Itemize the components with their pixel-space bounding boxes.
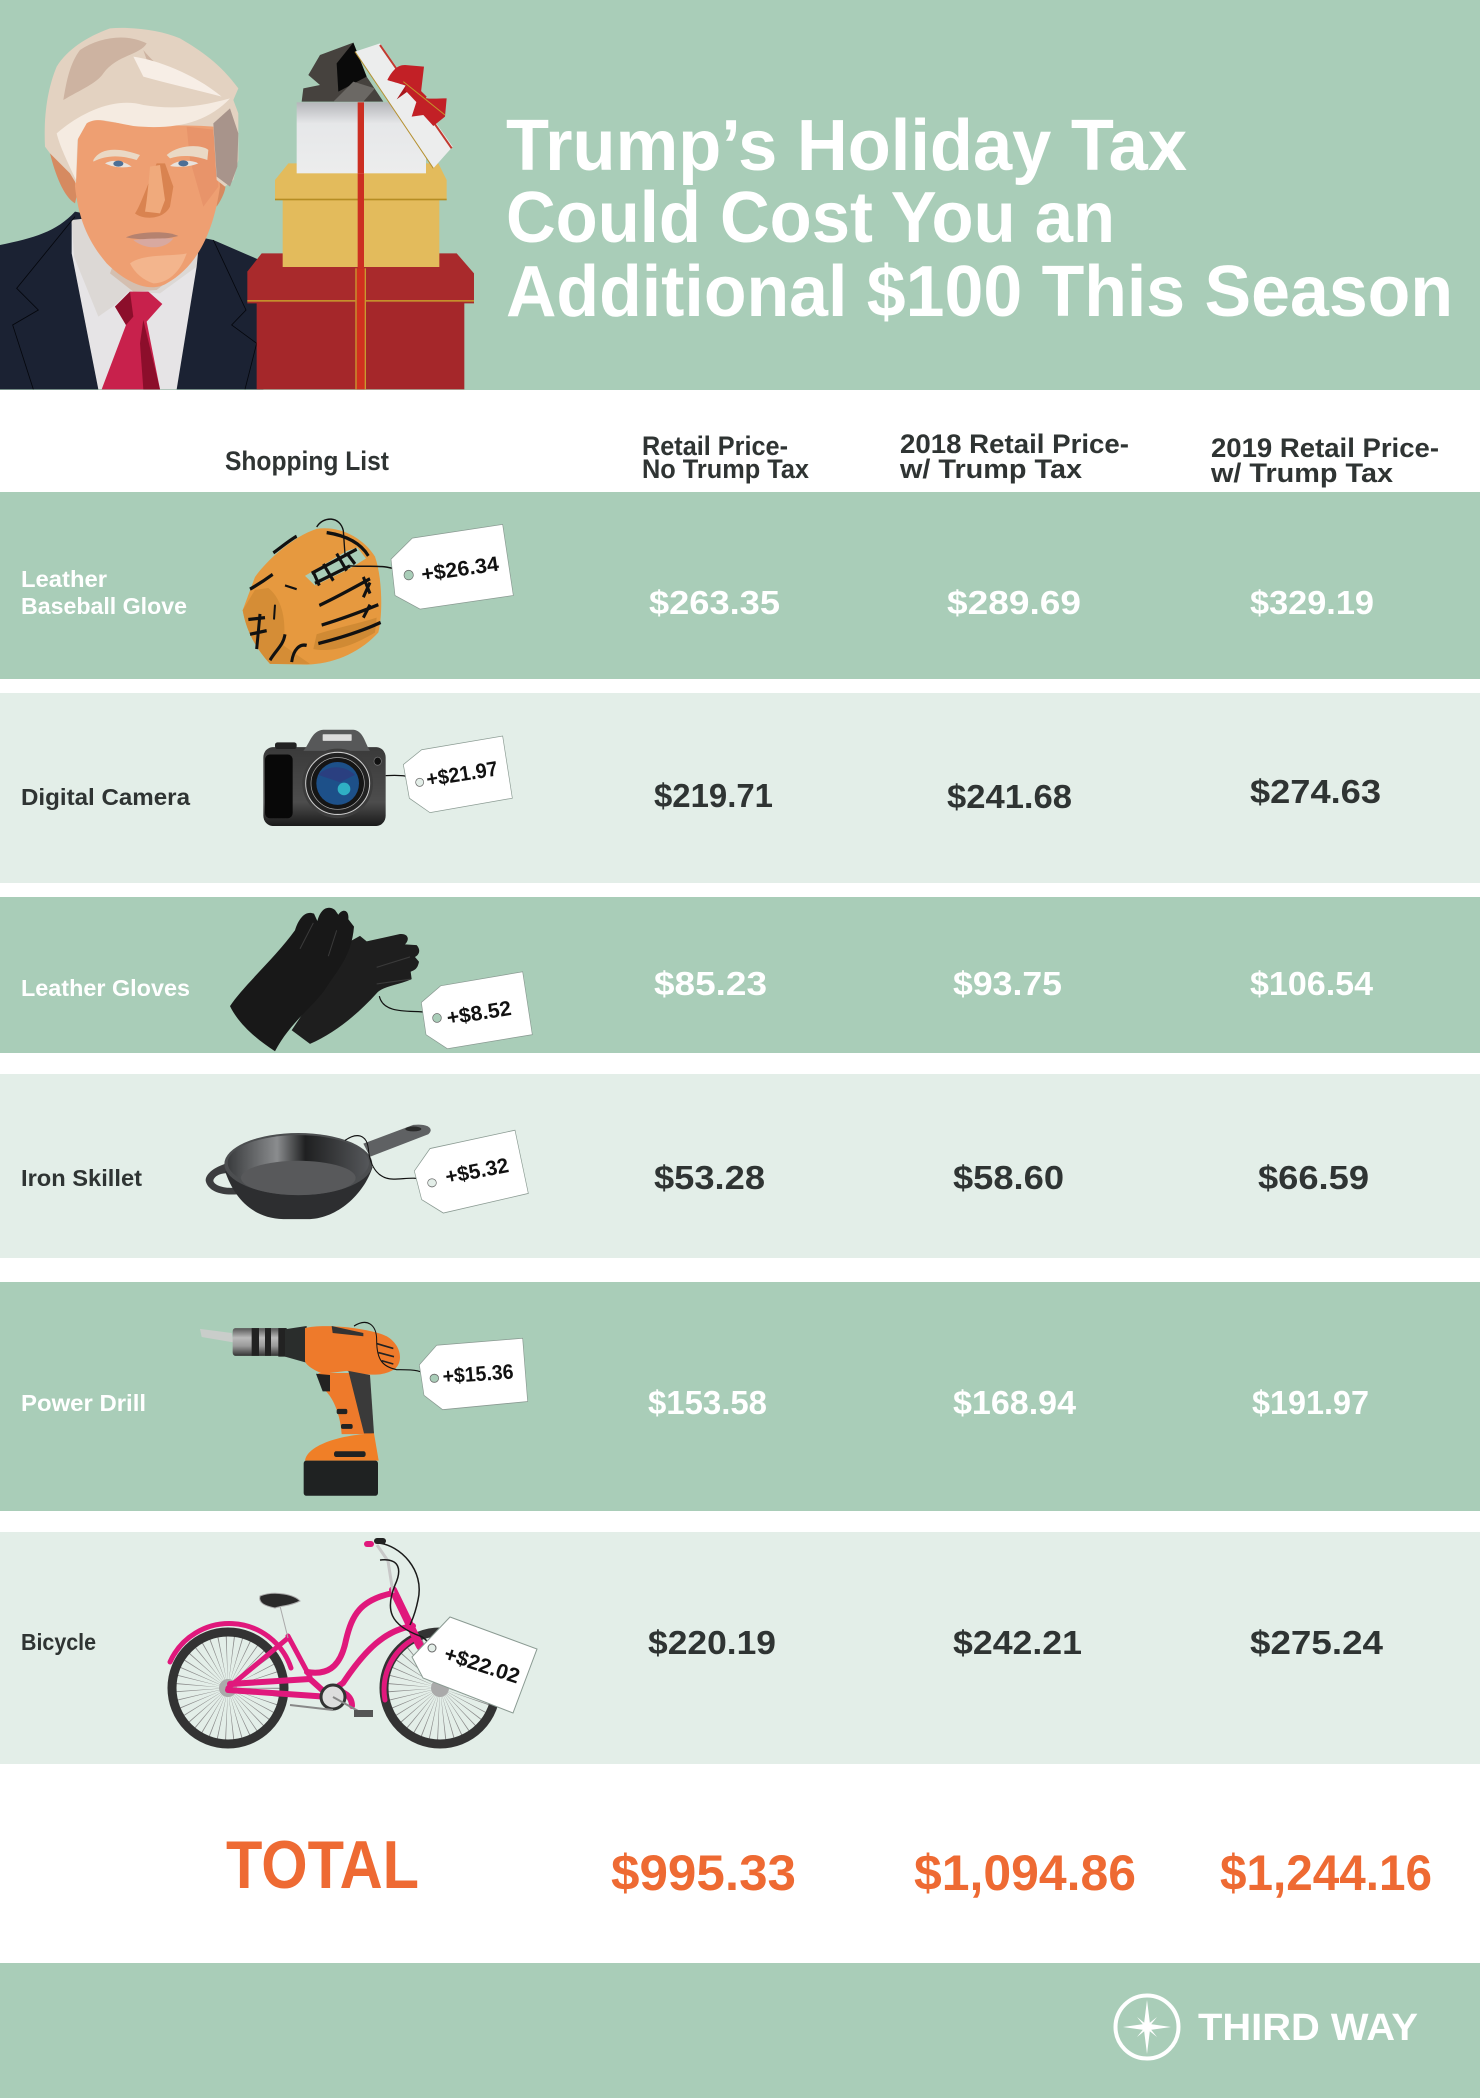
- row: bicycle: $220.19: [648, 1624, 776, 1661]
- icon: baseball glove with tag: [243, 519, 513, 665]
- row: leather baseball glove: Leather: [21, 566, 107, 592]
- row: leather baseball glove: $263.35: [649, 584, 780, 621]
- row: leather baseball glove: $289.69: [947, 584, 1081, 621]
- brows: [93, 150, 140, 162]
- nose: [135, 163, 173, 218]
- column headers: Retail Price-: [642, 431, 788, 461]
- tag text: drill: +$15.36: [442, 1361, 514, 1388]
- open lid and bow: [355, 43, 453, 168]
- row: bicycle: $242.21: [953, 1624, 1082, 1661]
- row: bicycle: [0, 1532, 1480, 1764]
- price tag: [419, 1338, 528, 1410]
- totals row: [226, 1827, 1432, 1903]
- row: digital camera: [0, 693, 1480, 883]
- row: digital camera: $274.63: [1250, 773, 1381, 810]
- gold box: [275, 163, 447, 268]
- totals row: $995.33: [611, 1845, 796, 1901]
- row: leather baseball glove: [0, 492, 1480, 679]
- tag text: bicycle: +$22.02: [441, 1642, 522, 1688]
- row: iron skillet: $58.60: [953, 1159, 1064, 1196]
- row: bicycle: Bicycle: [21, 1629, 96, 1655]
- row: leather gloves: Leather Gloves: [21, 975, 190, 1001]
- icon: bicycle: [170, 1538, 537, 1744]
- totals row: $1,244.16: [1220, 1845, 1432, 1901]
- title: [506, 106, 1453, 332]
- row: leather baseball glove: Baseball Glove: [21, 593, 187, 619]
- hair: [45, 28, 238, 187]
- totals row: TOTAL: [226, 1827, 419, 1903]
- face: [75, 113, 220, 287]
- column headers: No Trump Tax: [642, 454, 809, 484]
- totals row: $1,094.86: [914, 1845, 1136, 1901]
- row: power drill: $191.97: [1252, 1384, 1369, 1421]
- tag text: glove: +$26.34: [420, 553, 501, 586]
- column headers: 2019 Retail Price-: [1211, 433, 1439, 463]
- row: leather gloves: [0, 897, 1480, 1053]
- price tag: [421, 972, 532, 1049]
- front wheel: [384, 1632, 496, 1744]
- price tag: [403, 736, 512, 813]
- row: bicycle: $275.24: [1250, 1624, 1384, 1661]
- row: power drill: $153.58: [648, 1384, 767, 1421]
- title: Could Cost You an: [506, 178, 1115, 258]
- row: iron skillet: $53.28: [654, 1159, 765, 1196]
- rear wheel: [172, 1632, 284, 1744]
- row: leather gloves: $85.23: [654, 965, 767, 1002]
- title: Additional $100 This Season: [506, 252, 1453, 332]
- shirt: [72, 220, 197, 389]
- red box: [247, 253, 474, 389]
- row: power drill: $168.94: [953, 1384, 1077, 1421]
- price tag: [391, 524, 513, 609]
- column headers: [225, 429, 1439, 488]
- seat: [260, 1593, 300, 1638]
- row: power drill: [0, 1282, 1480, 1511]
- column headers: Shopping List: [225, 446, 389, 476]
- logo: third way: THIRD WAY: [1198, 2007, 1418, 2049]
- row: leather baseball glove: $329.19: [1250, 584, 1374, 621]
- row: leather gloves: $106.54: [1250, 965, 1374, 1002]
- footer band: [0, 1963, 1480, 2098]
- row: digital camera: $219.71: [654, 777, 773, 814]
- row: digital camera: Digital Camera: [21, 784, 190, 810]
- price tag: [412, 1617, 537, 1713]
- lips: [126, 232, 178, 239]
- column headers: w/ Trump Tax: [1210, 458, 1393, 488]
- column headers: 2018 Retail Price-: [900, 429, 1129, 459]
- title: Trump’s Holiday Tax: [506, 106, 1187, 186]
- portrait illustration: [0, 28, 474, 389]
- suit: [0, 212, 263, 389]
- white box: [297, 102, 426, 173]
- logo: third way: [1116, 1996, 1418, 2058]
- icon: power drill with tag: [200, 1322, 528, 1496]
- eyes: [105, 161, 132, 167]
- ear: [50, 153, 83, 203]
- row: digital camera: $241.68: [947, 778, 1072, 815]
- icon: iron skillet with tag: [206, 1125, 528, 1219]
- row: power drill: Power Drill: [21, 1390, 146, 1416]
- icon: camera with tag: [263, 730, 512, 826]
- icon: compass: [1116, 1996, 1178, 2058]
- coal: [302, 43, 383, 102]
- column headers: w/ Trump Tax: [899, 454, 1082, 484]
- row: iron skillet: Iron Skillet: [21, 1165, 142, 1191]
- frame: [170, 1590, 420, 1706]
- lapels: [13, 217, 257, 389]
- price tag: [414, 1130, 528, 1213]
- tie: [102, 292, 162, 389]
- row: iron skillet: [0, 1074, 1480, 1258]
- handlebars: [364, 1538, 433, 1652]
- header banner: [0, 0, 1480, 390]
- drivetrain: [290, 1685, 373, 1717]
- tag text: camera: +$21.97: [425, 758, 499, 791]
- tag text: leather gloves: +$8.52: [445, 997, 513, 1030]
- row: leather gloves: $93.75: [953, 965, 1062, 1002]
- tag text: skillet: +$5.32: [443, 1154, 511, 1189]
- icon: leather gloves with tag: [230, 908, 532, 1051]
- row: iron skillet: $66.59: [1258, 1159, 1369, 1196]
